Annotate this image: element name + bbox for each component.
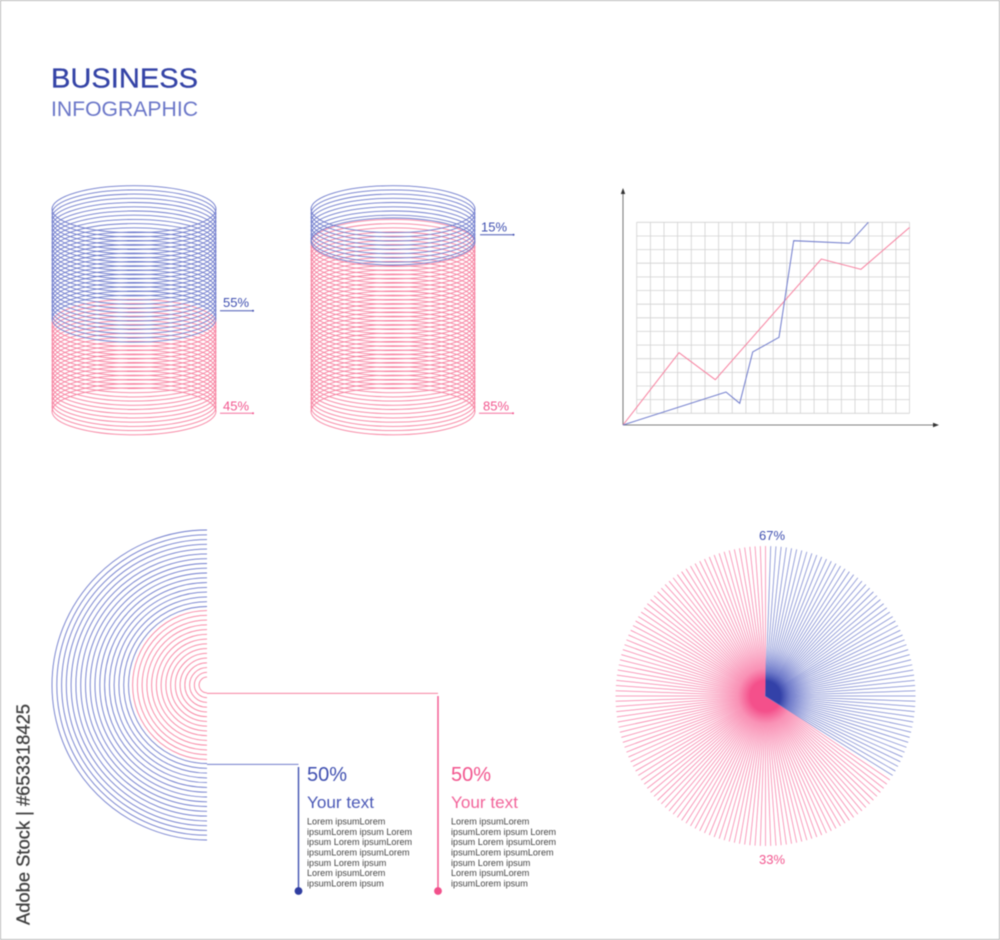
title: INFOGRAPHIC bbox=[51, 98, 198, 121]
text block: blue 50%: Lorem ipsumLorem bbox=[307, 816, 385, 826]
text block: blue 50%: 50% bbox=[307, 764, 347, 786]
chart grid bbox=[637, 222, 910, 413]
line chart bbox=[621, 188, 939, 427]
text block: blue 50%: Your text bbox=[307, 794, 374, 812]
text block: blue 50%: ipsumLorem ipsum Lorem bbox=[307, 827, 412, 837]
title bbox=[51, 62, 198, 121]
pink centre haze bbox=[696, 626, 825, 766]
radial pie chart bbox=[616, 546, 916, 846]
label: 55%: 55% bbox=[223, 295, 249, 310]
text block: blue 50%: ipsumLorem ipsum bbox=[307, 878, 384, 888]
title: BUSINESS bbox=[51, 62, 198, 94]
text block: blue 50%: ipsumLorem ipsumLorem bbox=[307, 848, 410, 858]
label: 85%: 85% bbox=[483, 398, 509, 414]
blue series line bbox=[623, 222, 868, 425]
text block: pink 50% bbox=[451, 764, 556, 888]
blue arcs bbox=[50, 528, 208, 842]
text block: blue 50% bbox=[307, 764, 412, 888]
semicircle chart bbox=[50, 528, 208, 842]
x and y axes bbox=[621, 188, 939, 427]
pink series line bbox=[623, 228, 910, 425]
text block: pink 50%: ipsum Lorem ipsumLorem bbox=[451, 837, 556, 847]
cylinder chart: 55% / 45% bbox=[52, 186, 254, 435]
blue spokes 33 percent area bbox=[766, 546, 916, 775]
text block: blue 50%: ipsum Lorem ipsumLorem bbox=[307, 837, 412, 847]
label: 45%: 45% bbox=[223, 398, 249, 414]
text block: pink 50%: Lorem ipsumLorem bbox=[451, 868, 529, 878]
text block: blue 50%: Lorem ipsumLorem bbox=[307, 868, 385, 878]
text block: pink 50%: 50% bbox=[451, 764, 491, 786]
pink rings 85% bbox=[311, 219, 475, 435]
cylinder chart: 15% / 85% bbox=[311, 186, 514, 435]
pie label: 33%: 33% bbox=[759, 852, 785, 867]
pink spokes 67 percent area bbox=[616, 546, 890, 846]
side credit text: Adobe Stock | #653318425 bbox=[14, 704, 34, 925]
text block: pink 50%: ipsumLorem ipsum bbox=[451, 878, 528, 888]
text block: pink 50%: Your text bbox=[451, 794, 518, 812]
connector: blue bbox=[207, 764, 302, 895]
text block: blue 50%: ipsum Lorem ipsum bbox=[307, 858, 386, 868]
text block: pink 50%: ipsumLorem ipsum Lorem bbox=[451, 827, 556, 837]
blue centre haze bbox=[766, 646, 816, 722]
pink rings 45% bbox=[52, 299, 216, 435]
text block: pink 50%: Lorem ipsumLorem bbox=[451, 816, 529, 826]
label: 55% bbox=[220, 295, 254, 312]
pie label: 67%: 67% bbox=[759, 528, 785, 543]
label: 15%: 15% bbox=[481, 220, 507, 235]
connector: pink bbox=[207, 693, 442, 895]
text block: pink 50%: ipsumLorem ipsumLorem bbox=[451, 848, 554, 858]
pink arcs bbox=[132, 610, 208, 760]
blue rings 55% bbox=[52, 186, 216, 342]
blue rings 15% bbox=[311, 186, 475, 265]
text block: pink 50%: ipsum Lorem ipsum bbox=[451, 858, 530, 868]
